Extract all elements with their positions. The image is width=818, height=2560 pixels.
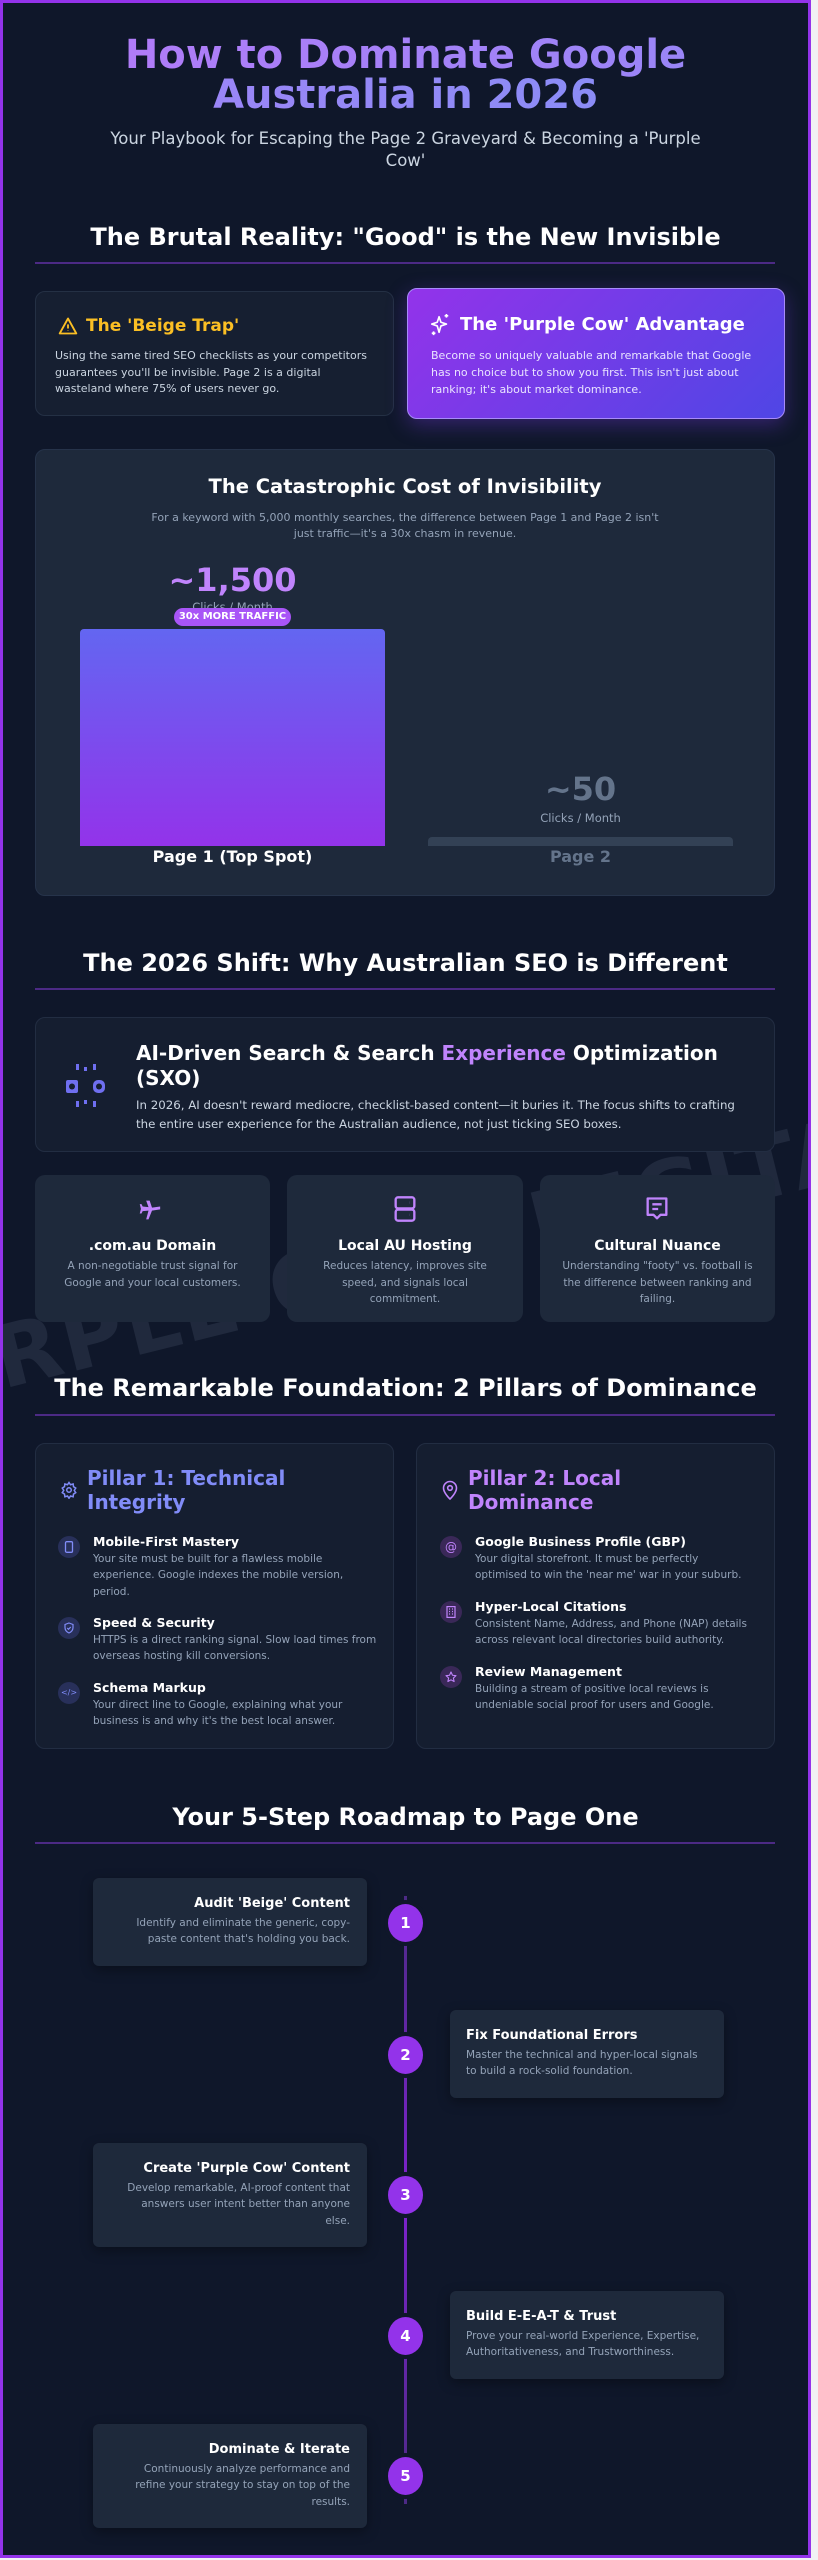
item: reviews: Review Management [475,1664,622,1679]
text: In 2026, AI doesn't reward mediocre, checklist-based content—it buries it. The focus shifts to crafting the entire user experience for the Australian audience, not just ticking SEO boxes. [136,1098,735,1131]
step 1: Audit 'Beige' Content [194,1896,350,1911]
title: Pillar 1: Technical [87,1466,285,1490]
bar: page 1: Page 1 (Top Spot) [153,847,312,866]
bar: page 1 [80,561,385,866]
step 1 [93,1878,367,1966]
step 1: Identify and eliminate the generic, copy-paste content that's holding you back. [136,1917,350,1945]
card: com.au: A non-negotiable trust signal for Google and your local customers. [64,1260,241,1288]
step marker 4 [388,2317,423,2355]
card: cultural [540,1175,775,1322]
step 4 [450,2291,724,2379]
text: Become so uniquely valuable and remarkable that Google has no choice but to show you first. This isn't just about ranking; it's about market dominance. [431,349,751,396]
timeline line [404,1896,407,2504]
title [87,1466,285,1514]
step 3: Develop remarkable, AI-proof content that answers user intent better than anyone else. [127,2182,350,2227]
icon: plane [140,1200,160,1220]
item: GBP: @ [445,1540,457,1554]
badge: 30x MORE TRAFFIC [179,611,286,622]
title: Australia in 2026 [213,72,598,118]
bar: page 1: Clicks / Month [192,600,273,614]
bar: page 1: ~1,500 [168,561,297,599]
item: citations: Hyper-Local Citations [475,1599,626,1614]
step 3 [93,2143,367,2247]
step 5: Continuously analyze performance and refine your strategy to stay on top of the results. [135,2463,350,2508]
card: com.au [35,1175,270,1322]
item: speed [58,1615,376,1662]
chart title: The Catastrophic Cost of Invisibility [209,475,601,498]
card: beige trap [35,291,394,416]
step marker 4: 4 [400,2327,411,2345]
item: GBP: Google Business Profile (GBP) [475,1534,686,1549]
bar: page 2: Clicks / Month [540,811,621,825]
card: hosting: Local AU Hosting [338,1238,472,1254]
title: AI-Driven Search & Search Experience Optimization (SXO) [136,1041,718,1090]
item: citations: Consistent Name, Address, and Phone (NAP) details across relevant local directories build authority. [475,1618,747,1646]
heading: roadmap: Your 5-Step Roadmap to Page One [172,1803,639,1831]
heading: The 'Beige Trap' [86,316,239,336]
step marker 1 [388,1904,423,1942]
step 2 [450,2010,724,2098]
text: Using the same tired SEO checklists as your competitors guarantees you'll be invisible. Page 2 is a digital wasteland where 75% of users never go. [55,349,367,395]
title: Dominance [468,1490,593,1514]
title: Integrity [87,1490,185,1514]
step 4: Prove your real-world Experience, Expertise, Authoritativeness, and Trustworthiness. [466,2330,699,2358]
item: mobile: Your site must be built for a flawless mobile experience. Google indexes the mobile version, period. [93,1553,343,1598]
panel: pillar 2 [416,1443,775,1749]
step 5: Dominate & Iterate [209,2442,350,2457]
card: com.au: .com.au Domain [89,1238,216,1254]
item: mobile: Mobile-First Mastery [93,1534,239,1549]
item: citations [440,1599,747,1646]
icon: server [394,1196,416,1222]
item: mobile [58,1534,343,1598]
title [468,1466,621,1514]
item: schema [58,1680,342,1727]
step marker 1: 1 [400,1914,411,1932]
title: How to Dominate Google [125,32,686,78]
step marker 3: 3 [400,2186,411,2204]
icon: gear [61,1481,77,1499]
panel: chart [35,449,775,896]
icon: speech bubble [646,1197,668,1220]
item: reviews [440,1664,714,1711]
panel: pillar 1 [35,1443,394,1749]
step marker 5 [388,2457,423,2495]
step 4: Build E-E-A-T & Trust [466,2309,616,2324]
badge [174,608,291,626]
bar: page 2: ~50 [545,770,616,808]
step marker 3 [388,2176,423,2214]
step 5 [93,2424,367,2528]
item: GBP [440,1534,741,1581]
title: Pillar 2: Local [468,1466,621,1490]
step 2: Master the technical and hyper-local signals to build a rock-solid foundation. [466,2049,698,2077]
heading: 2026 shift: The 2026 Shift: Why Australian SEO is Different [83,949,728,977]
bar: page 2: Page 2 [550,847,611,866]
heading: brutal reality: The Brutal Reality: "Good" is the New Invisible [90,223,721,251]
panel: SXO [35,1017,775,1152]
icon: pin [442,1480,458,1500]
card: hosting [287,1175,523,1322]
step marker 2 [388,2036,423,2074]
item: schema: Schema Markup [93,1680,206,1695]
heading: The 'Purple Cow' Advantage [460,314,745,335]
title [125,32,686,118]
card: cultural: Understanding "footy" vs. football is the difference between ranking and failing. [562,1260,753,1305]
step 3: Create 'Purple Cow' Content [143,2161,350,2176]
card: purple cow [407,288,785,419]
item: speed: Speed & Security [93,1615,215,1630]
step marker 5: 5 [400,2467,411,2485]
chart subtitle: For a keyword with 5,000 monthly searches, the difference between Page 1 and Page 2 isn't just traffic—it's a 30x chasm in revenue. [151,511,659,540]
bar: page 2 [428,770,733,866]
subtitle: Your Playbook for Escaping the Page 2 Graveyard & Becoming a 'Purple Cow' [110,129,701,170]
icon: AI [66,1064,105,1107]
icon: sparkles [430,314,448,336]
heading: foundation: The Remarkable Foundation: 2 Pillars of Dominance [54,1374,757,1402]
step marker 2: 2 [400,2046,411,2064]
item: GBP: Your digital storefront. It must be perfectly optimised to win the 'near me' war in your suburb. [475,1553,741,1581]
card: hosting: Reduces latency, improves site speed, and signals local commitment. [323,1260,487,1305]
item: speed: HTTPS is a direct ranking signal. Slow load times from overseas hosting kill conversions. [93,1634,376,1662]
icon: warning [58,318,78,334]
card: cultural: Cultural Nuance [594,1238,721,1254]
item: schema: </> [61,1688,77,1697]
item: schema: Your direct line to Google, explaining what your business is and why it's the best local answer. [93,1699,342,1727]
item: reviews: Building a stream of positive local reviews is undeniable social proof for users and Google. [475,1683,714,1711]
step 2: Fix Foundational Errors [466,2028,638,2043]
